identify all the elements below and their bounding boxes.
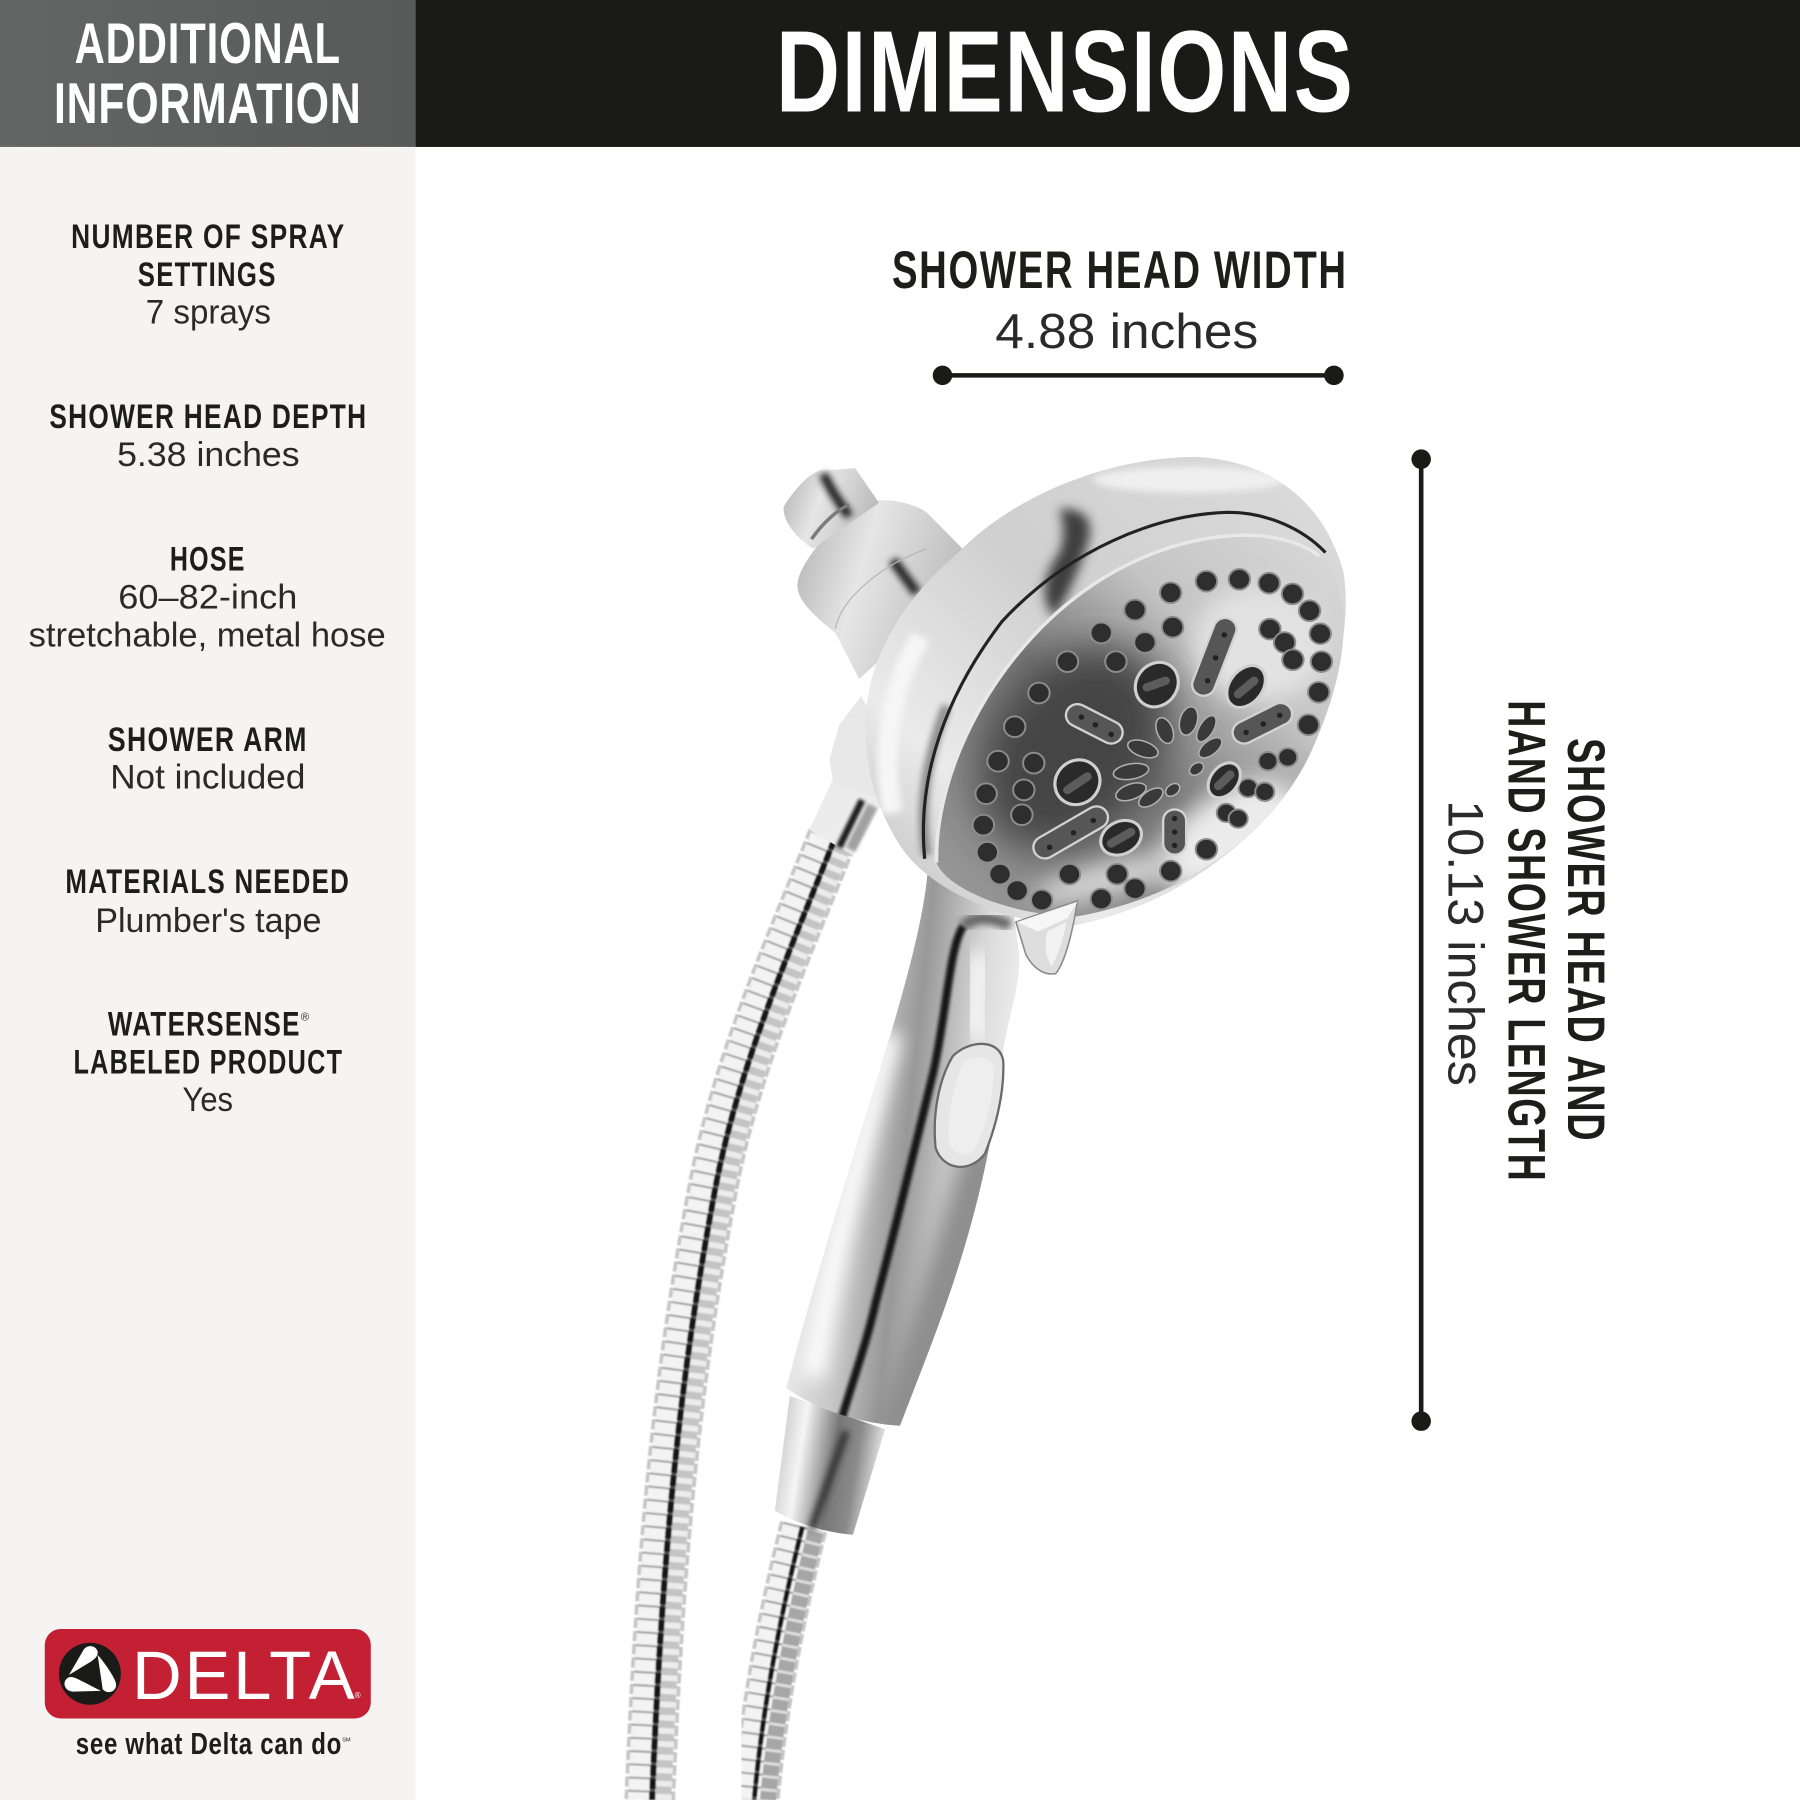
dimension label: shower head and hand shower length xyxy=(1438,700,1615,1182)
spec: watersense labeled product: LABELED PRODUCT xyxy=(73,1043,343,1081)
handle button xyxy=(935,1044,1003,1167)
head: capsule spray slots xyxy=(1045,629,1283,850)
title bar: dimensions: DIMENSIONS xyxy=(776,6,1355,136)
dimension label: shower head and hand shower length: SHOWER HEAD AND xyxy=(1556,738,1615,1142)
mount: swivel connector xyxy=(784,468,966,679)
logo: delta xyxy=(45,1629,371,1761)
spec: shower arm: SHOWER ARM xyxy=(108,721,308,759)
spec: number of spray settings: NUMBER OF SPRAY xyxy=(71,218,346,256)
head: spray selector lever xyxy=(1016,901,1077,974)
logo: delta: DELTA xyxy=(132,1637,355,1714)
head: centre petal nozzles xyxy=(1112,705,1226,811)
heading bar: additional information: ADDITIONAL xyxy=(75,12,341,76)
panel: additional information sidebar xyxy=(0,0,416,1800)
spec: materials needed: MATERIALS NEEDED xyxy=(65,863,350,901)
spec: shower head depth xyxy=(49,398,367,474)
heading bar: additional information: INFORMATION xyxy=(54,72,362,136)
dimension label: shower head width: SHOWER HEAD WIDTH xyxy=(892,241,1348,300)
product: hand shower illustration xyxy=(650,457,1346,1800)
dimension label: shower head and hand shower length: HAND SHOWER LENGTH xyxy=(1496,700,1555,1182)
spec: watersense labeled product: Yes xyxy=(183,1081,233,1119)
spec: watersense labeled product: ® xyxy=(301,1012,310,1024)
mount: white lower bracket xyxy=(829,696,879,798)
dimension label: shower head width xyxy=(892,241,1348,359)
logo: delta: see what Delta can do xyxy=(76,1726,342,1761)
arrow: width dimension line xyxy=(933,366,1344,385)
dimension label: shower head and hand shower length: 10.13 inches xyxy=(1438,800,1495,1086)
head: back shell xyxy=(865,457,1346,926)
spec: materials needed: Plumber's tape xyxy=(95,902,321,940)
spec: number of spray settings: 7 sprays xyxy=(146,294,271,332)
spec: hose: HOSE xyxy=(170,541,246,579)
handle body xyxy=(786,872,1019,1435)
head: spray face xyxy=(923,512,1344,916)
spec: hose xyxy=(29,541,386,654)
spec: number of spray settings: SETTINGS xyxy=(138,256,277,294)
hose: lower strand xyxy=(754,1527,816,1800)
arrow: length dimension line xyxy=(1411,449,1431,1431)
spec: hose: stretchable, metal hose xyxy=(29,616,386,654)
spec: shower head depth: SHOWER HEAD DEPTH xyxy=(49,398,367,436)
spec: shower head depth: 5.38 inches xyxy=(117,436,300,474)
shower head xyxy=(784,457,1346,974)
head: round spray openings xyxy=(1046,655,1273,862)
spec: number of spray settings xyxy=(71,218,346,332)
spec: shower arm: Not included xyxy=(110,759,305,797)
title bar: dimensions xyxy=(416,0,1800,147)
spec: hose: 60–82-inch xyxy=(118,578,297,616)
dimension label: shower head width: 4.88 inches xyxy=(995,304,1258,359)
spec: watersense labeled product: WATERSENSE xyxy=(108,1005,301,1043)
logo: delta: SM xyxy=(342,1737,351,1743)
hose ferrule xyxy=(809,758,882,855)
head: spray nozzles xyxy=(973,569,1332,910)
hose: upper strand xyxy=(650,838,845,1800)
heading bar: additional information xyxy=(0,0,416,147)
handle sleeve xyxy=(775,1396,885,1535)
spec: shower arm xyxy=(108,721,308,797)
spec: watersense labeled product xyxy=(73,1005,343,1119)
logo: delta: ® xyxy=(355,1691,361,1700)
spec: materials needed xyxy=(65,863,350,940)
